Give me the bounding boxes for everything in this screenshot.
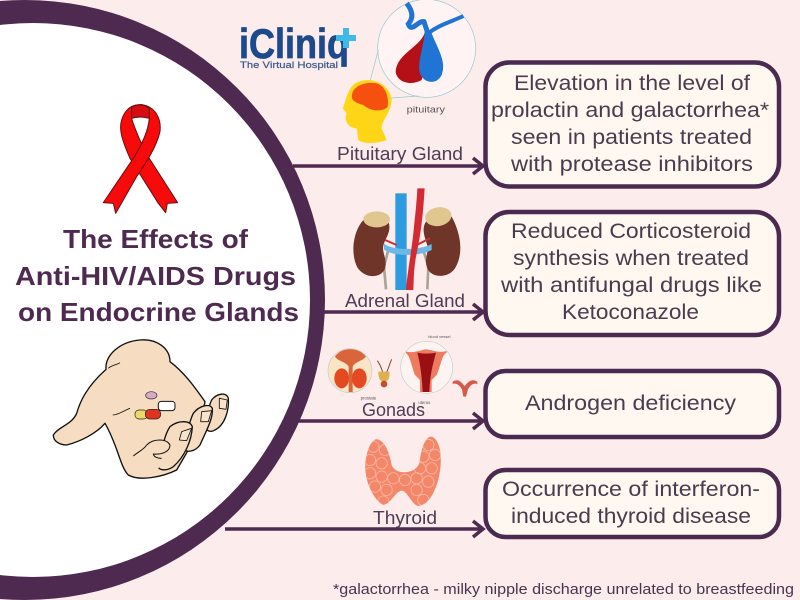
panel: pituitary effect: seen in patients treated [511,126,752,149]
icon: pituitary gland [343,0,476,143]
icon: gonads: prostate [361,395,377,400]
label: Thyroid: Thyroid [373,508,437,528]
title: on Endocrine Glands [18,297,299,327]
panel: gonads effect [486,371,779,437]
icon: pituitary gland: pituitary [407,105,445,115]
title [15,224,299,327]
panel: thyroid effect [486,470,779,537]
logo: iCliniq: iCliniq [239,20,349,67]
panel: pituitary effect: Elevation in the level of [514,72,750,95]
label: Gonads: Gonads [362,400,425,420]
arrow: thyroid [225,521,483,537]
panel: adrenal effect: with antifungal drugs like [500,274,762,297]
footnote: *galactorrhea - milky nipple discharge unrelated to breastfeeding [333,581,794,598]
panel: title circle [0,0,325,600]
panel: thyroid effect: Occurrence of interferon- [502,478,760,501]
arrow: gonads [296,413,483,429]
title: Anti-HIV/AIDS Drugs [15,261,296,291]
label: Adrenal Gland: Adrenal Gland [345,291,465,311]
logo: iCliniq: The Virtual Hospital [240,60,338,71]
panel: pituitary effect: with protease inhibitors [510,153,753,176]
panel: gonads effect: Androgen deficiency [525,392,737,415]
panel: pituitary effect: prolactin and galactorrhea* [491,99,769,122]
panel: adrenal effect: synthesis when treated [513,247,749,270]
icon: gonads: blood vessel [428,334,451,339]
icon: kidneys [353,188,460,290]
arrow: adrenal [322,304,483,320]
panel: thyroid effect: induced thyroid disease [511,505,751,528]
panel: adrenal effect [486,212,779,335]
icon: gonads: uterus [418,400,430,405]
icon: red ribbon [103,105,178,213]
label: Pituitary Gland: Pituitary Gland [337,144,463,164]
panel: adrenal effect: Ketoconazole [562,301,699,324]
arrow: pituitary [293,158,483,174]
icon: gonads [328,334,477,405]
title: The Effects of [63,224,248,254]
panel: pituitary effect [486,62,779,186]
icon: thyroid [364,437,441,507]
icon: hand with pills [53,340,228,478]
panel: adrenal effect: Reduced Corticosteroid [511,220,751,243]
